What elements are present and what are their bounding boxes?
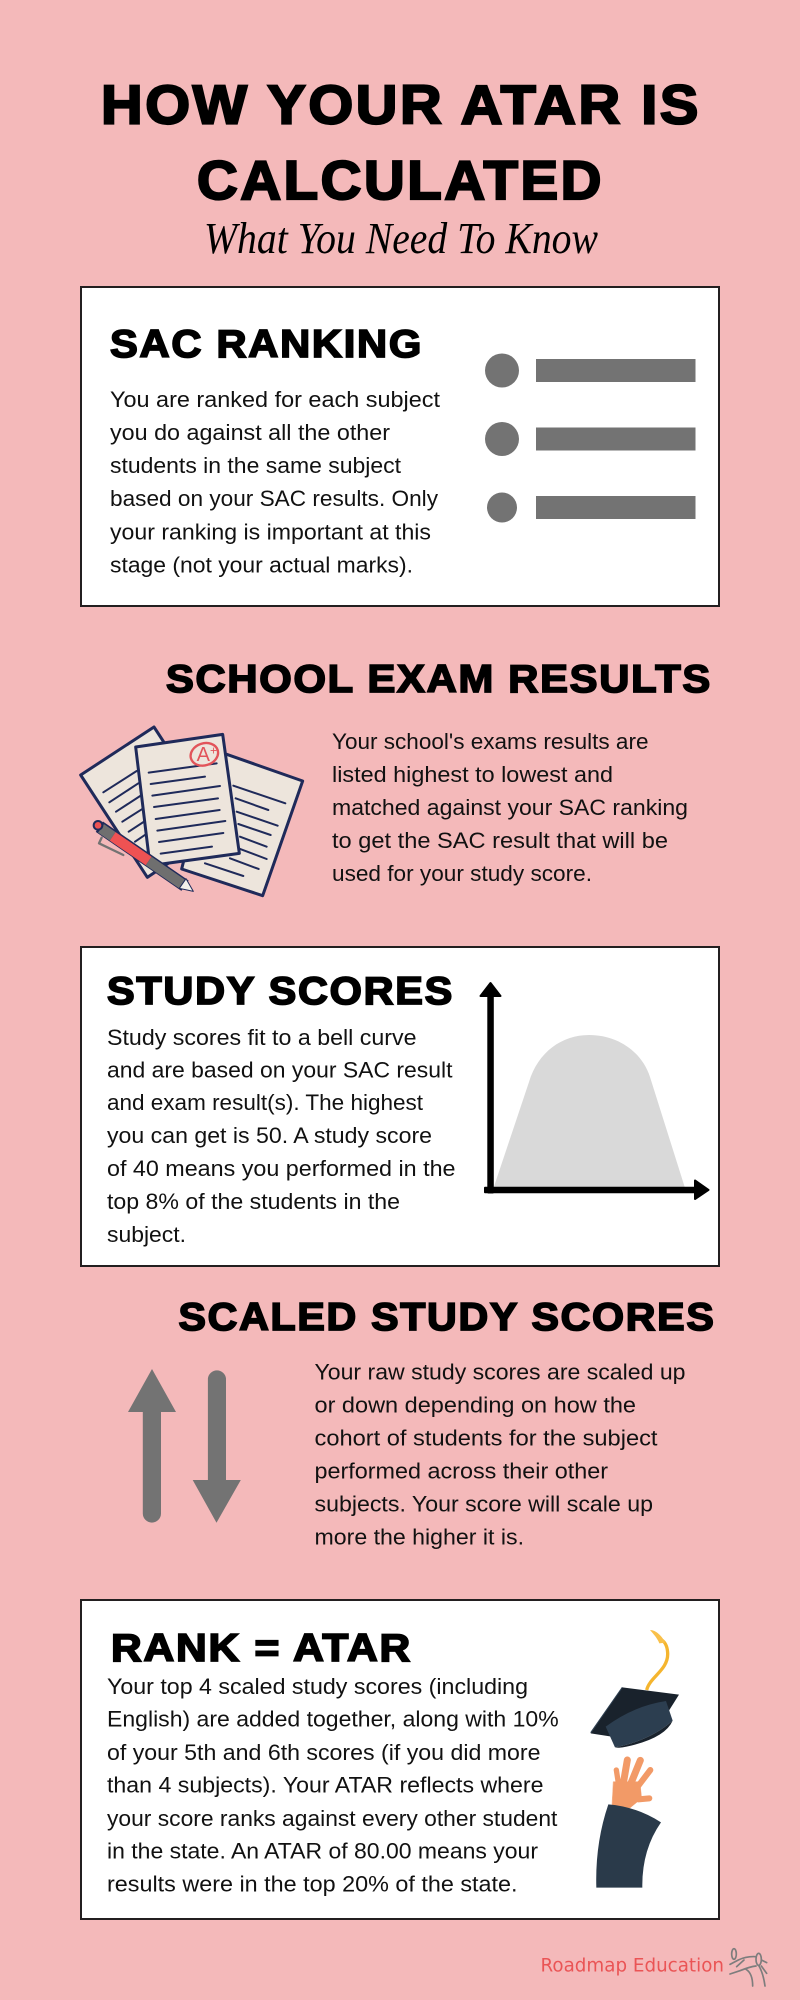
icon: graduation cap and hand — [591, 1630, 679, 1888]
text block: study scores — [107, 1025, 456, 1247]
panel: scaled study scores — [128, 1296, 716, 1550]
panel: study scores — [81, 947, 719, 1266]
text block: SAC ranking: based on your SAC results. Only — [110, 486, 438, 511]
cap — [591, 1687, 679, 1748]
hand — [612, 1760, 650, 1808]
text block: school exam results: used for your study score. — [332, 861, 592, 886]
title: HOW YOUR ATAR IS — [101, 74, 701, 136]
card background — [81, 1600, 719, 1919]
text block: rank equals ATAR: than 4 subjects). Your ATAR reflects where — [107, 1773, 544, 1798]
text block: scaled study scores: Your raw study scores are scaled up — [314, 1359, 686, 1384]
panel: school exam results — [81, 658, 712, 896]
text block: SAC ranking — [110, 387, 440, 578]
text block: rank equals ATAR: of your 5th and 6th scores (if you did more — [107, 1740, 540, 1765]
text block: school exam results — [332, 729, 688, 886]
text block: SAC ranking: students in the same subject — [110, 453, 401, 478]
icon: exam papers and pen — [81, 727, 303, 896]
text block: SAC ranking: your ranking is important at this — [110, 520, 431, 544]
text block: SAC ranking: You are ranked for each subject — [110, 387, 440, 412]
text block: school exam results: listed highest to lowest and — [332, 762, 613, 787]
text block: school exam results: Your school's exams results are — [332, 729, 648, 754]
text block: study scores: Study scores fit to a bell curve — [107, 1025, 417, 1050]
text block: scaled study scores: more the higher it is. — [314, 1525, 524, 1550]
card background — [81, 287, 719, 606]
text block: school exam results: to get the SAC result that will be — [332, 828, 668, 853]
y axis arrow — [480, 983, 500, 1192]
panel: rank equals ATAR — [81, 1600, 719, 1919]
icon: up and down arrows — [128, 1369, 241, 1523]
text block: rank equals ATAR: in the state. An ATAR of 80.00 means your — [107, 1839, 538, 1864]
text block: study scores: of 40 means you performed in the — [107, 1156, 456, 1181]
text block: school exam results: matched against your SAC ranking — [332, 795, 688, 820]
x axis arrow — [485, 1180, 708, 1199]
text block: study scores: you can get is 50. A study score — [107, 1123, 432, 1148]
panel: SAC ranking — [81, 287, 719, 606]
text block: SAC ranking: you do against all the other — [110, 420, 390, 445]
text block: SAC ranking: stage (not your actual marks). — [110, 552, 413, 578]
text block: study scores: and are based on your SAC result — [107, 1058, 452, 1083]
text block: study scores: and exam result(s). The highest — [107, 1090, 423, 1115]
text block: study scores: top 8% of the students in the — [107, 1189, 400, 1214]
heading: scaled study scores: SCALED STUDY SCORES — [178, 1296, 716, 1339]
icon: exam papers and pen: + — [210, 743, 217, 757]
bell curve shape — [494, 1035, 685, 1188]
heading: rank equals ATAR: RANK = ATAR — [111, 1627, 412, 1670]
text block: rank equals ATAR: results were in the top 20% of the state. — [107, 1872, 518, 1897]
heading: SAC ranking: SAC RANKING — [110, 323, 423, 366]
footer: Roadmap Education brand — [540, 1949, 767, 1986]
heading: school exam results: SCHOOL EXAM RESULTS — [166, 658, 712, 701]
icon: exam papers and pen: A — [197, 744, 210, 766]
text block: scaled study scores: subjects. Your score will scale up — [314, 1492, 653, 1517]
tassel — [647, 1630, 668, 1690]
title: CALCULATED — [197, 149, 604, 211]
text block: scaled study scores: or down depending on how the — [314, 1393, 636, 1418]
text block: rank equals ATAR: your score ranks against every other student — [107, 1806, 557, 1831]
brand name: Roadmap Education — [540, 1954, 724, 1976]
text block: scaled study scores — [314, 1359, 686, 1550]
text block: study scores: subject. — [107, 1222, 186, 1247]
card background — [81, 947, 719, 1266]
heading: study scores: STUDY SCORES — [107, 970, 454, 1013]
icon: ranked list — [485, 354, 696, 522]
subtitle: What You Need To Know — [204, 214, 599, 263]
sleeve — [596, 1804, 661, 1888]
text block: rank equals ATAR: English) are added together, along with 10% — [107, 1707, 559, 1732]
chart: bell curve — [480, 983, 708, 1199]
text block: rank equals ATAR — [107, 1674, 559, 1897]
title — [101, 74, 701, 211]
text block: scaled study scores: performed across their other — [314, 1459, 608, 1484]
icon: road logo — [730, 1949, 767, 1986]
text block: scaled study scores: cohort of students for the subject — [314, 1425, 658, 1450]
text block: rank equals ATAR: Your top 4 scaled study scores (including — [107, 1674, 528, 1699]
